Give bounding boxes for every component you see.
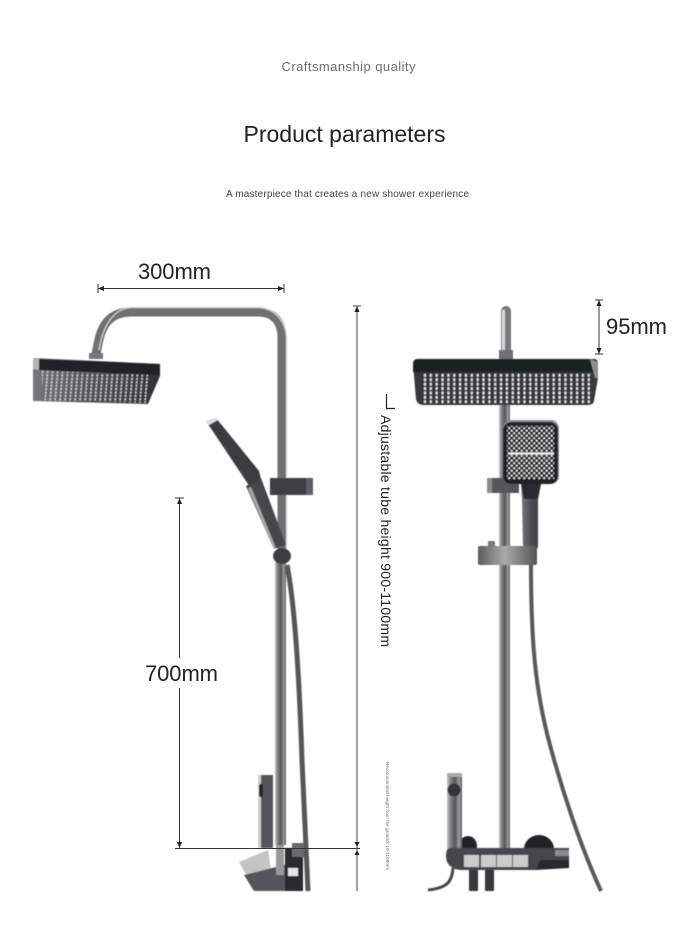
right front-view shower (413, 311, 601, 891)
subtitle: A masterpiece that creates a new shower experience (226, 189, 469, 200)
hand shower front (503, 420, 559, 548)
sliding clamp (478, 541, 537, 565)
hose joint (273, 548, 291, 564)
dimension: 700mm: 700mm (145, 661, 218, 686)
dimension: 300mm: 300mm (138, 259, 211, 284)
rail (499, 405, 510, 850)
dimension: 95mm (595, 300, 667, 354)
dimension: 95mm: 95mm (606, 314, 667, 339)
title: Product parameters: Product parameters (244, 121, 446, 147)
hand shower (206, 418, 286, 549)
dimension: 700mm (145, 498, 360, 848)
eyebrow: Craftsmanship quality: Craftsmanship quality (282, 59, 416, 74)
dimension: 300mm (98, 259, 284, 293)
valve body side view (239, 843, 304, 891)
L mark (386, 394, 395, 408)
hose (287, 565, 308, 891)
supply pipes and small hose (428, 868, 494, 891)
overhead shower head (33, 358, 160, 404)
rail bracket (487, 478, 519, 493)
hand spout (447, 773, 462, 849)
top gooseneck (499, 311, 513, 359)
left side-view shower (33, 308, 313, 891)
thermostatic valve body (446, 848, 569, 870)
overhead arm and rail (89, 308, 286, 845)
rotated label: tube height: Adjustable tube height 900-1100mm (378, 415, 394, 647)
dimension: adjustable tube height (353, 306, 395, 891)
overhead shower head (413, 359, 598, 405)
hand spout (258, 775, 273, 848)
rotated fine print: Recommended height from the ground: 10-1100mm (385, 762, 390, 870)
wall mounts (459, 835, 554, 863)
handle (521, 484, 541, 548)
rail bracket (270, 478, 313, 495)
hose (531, 565, 601, 891)
